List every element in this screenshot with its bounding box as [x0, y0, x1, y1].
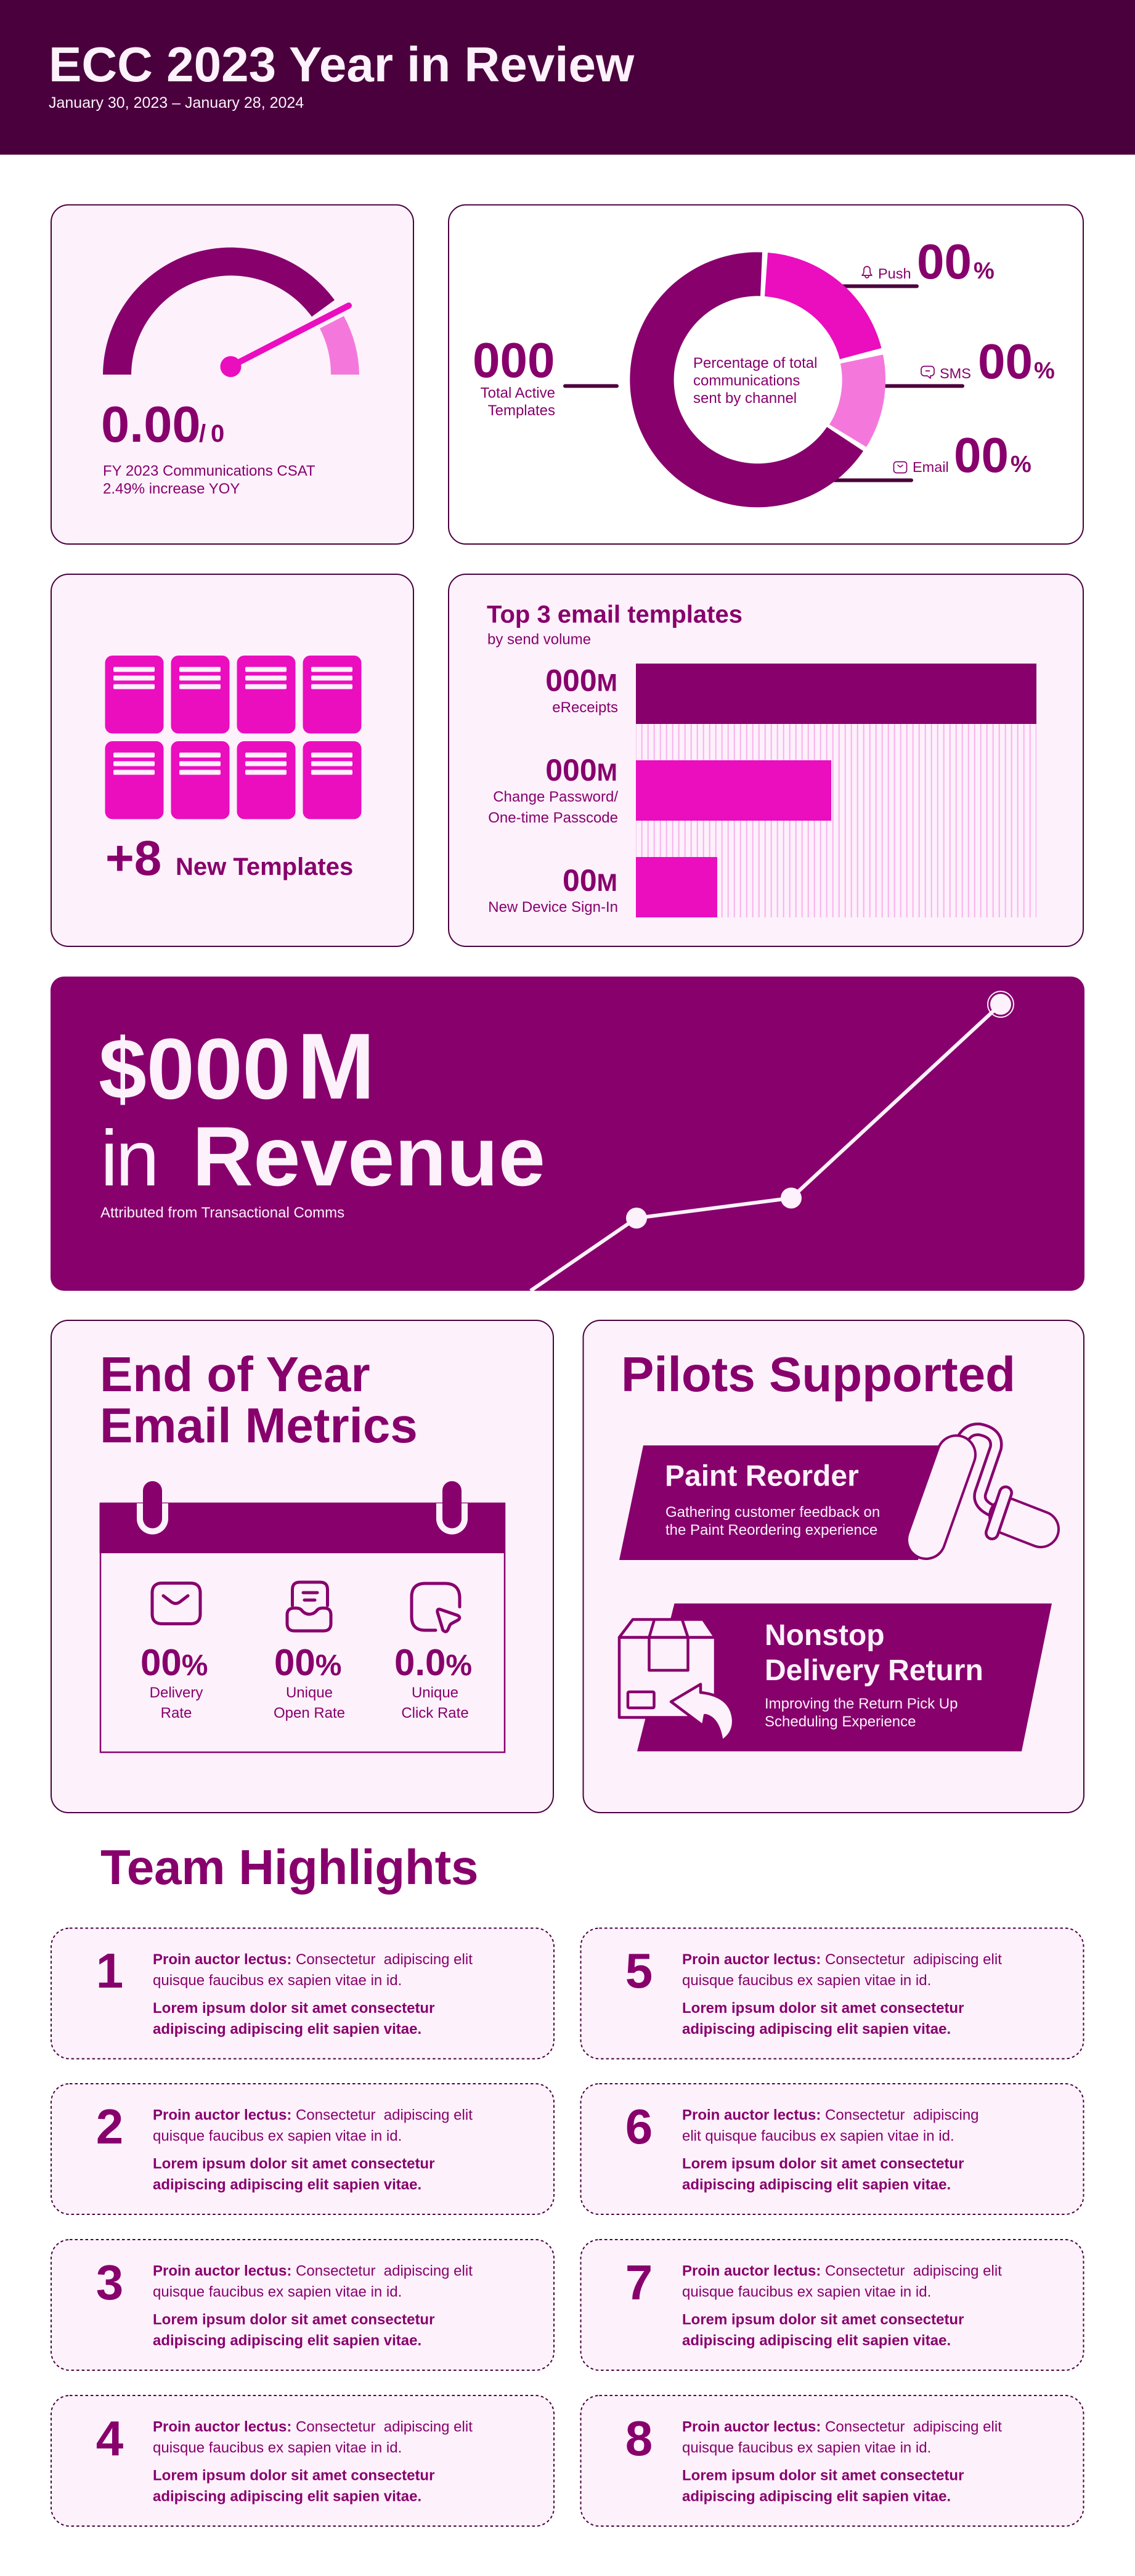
number: 1 — [96, 1943, 123, 1998]
revenue trend line — [531, 991, 1014, 1291]
email value: 00 — [954, 428, 1009, 482]
banner: nonstop delivery return — [637, 1603, 1052, 1751]
revenue value: M — [297, 1014, 375, 1119]
icon grid: eight documents — [105, 656, 361, 819]
number: 5 — [625, 1943, 653, 1998]
panel: top 3 email templates — [449, 574, 1083, 946]
number: 2 — [96, 2099, 123, 2154]
banner: paint reorder — [619, 1445, 943, 1560]
icon: delivery envelope — [152, 1583, 200, 1624]
highlight text: Proin auctor lectus: Consectetur adipiscing elit — [682, 1951, 1002, 1968]
highlight text: Lorem ipsum dolor sit amet consectetur — [153, 2155, 434, 2172]
highlight text: Lorem ipsum dolor sit amet consectetur — [682, 2467, 964, 2484]
number: 7 — [625, 2255, 653, 2310]
highlight text: Proin auctor lectus: Consectetur adipiscing elit — [153, 2262, 473, 2280]
highlight card 8 — [580, 2395, 1083, 2526]
highlight card 5 — [580, 1928, 1083, 2059]
highlight card 1 — [51, 1928, 554, 2059]
icon: email — [893, 462, 907, 473]
bar label: password: Change Password/ — [493, 789, 618, 805]
sms value: 00 — [978, 334, 1033, 389]
highlight card 2 — [51, 2084, 554, 2214]
panel: revenue — [51, 977, 1084, 1291]
highlight text: quisque faucibus ex sapien vitae in id. — [153, 2283, 402, 2301]
CSAT caption: FY 2023 Communications CSAT — [103, 463, 315, 479]
highlight text: quisque faucibus ex sapien vitae in id. — [153, 2440, 402, 2456]
nonstop description: Scheduling Experience — [765, 1713, 916, 1730]
highlight text: Lorem ipsum dolor sit amet consectetur — [682, 2155, 964, 2172]
donut center label: Percentage of total — [693, 355, 817, 372]
panel heading: Email Metrics — [100, 1398, 418, 1453]
highlight text: Proin auctor lectus: Consectetur adipiscing elit — [153, 1951, 473, 1968]
panel: channel donut — [449, 205, 1083, 544]
total templates label: Total Active — [481, 384, 555, 402]
highlight text: elit quisque faucibus ex sapien vitae in id. — [682, 2128, 954, 2144]
highlight card 6 — [580, 2084, 1083, 2214]
revenue attribution: Attributed from Transactional Comms — [100, 1205, 344, 1221]
nonstop heading: Nonstop — [765, 1619, 885, 1652]
bar chart — [636, 664, 1036, 917]
revenue value: $000 — [99, 1020, 290, 1117]
chart subheading: by send volume — [487, 631, 591, 648]
highlight card 4 — [51, 2395, 554, 2526]
icon: bell — [862, 266, 872, 278]
metric: unique open rate: Unique — [286, 1684, 333, 1701]
revenue label: in — [100, 1115, 157, 1203]
panel: email metrics — [51, 1320, 553, 1813]
metric: unique open rate: 00% — [274, 1642, 341, 1683]
highlight card 7 — [580, 2240, 1083, 2370]
panel heading: End of Year — [100, 1347, 370, 1402]
highlight text: adipiscing adipiscing elit sapien vitae. — [682, 2488, 951, 2505]
revenue label: Revenue — [192, 1110, 545, 1204]
highlight text: Lorem ipsum dolor sit amet consectetur — [682, 2000, 964, 2017]
highlight text: Lorem ipsum dolor sit amet consectetur — [153, 2000, 434, 2017]
highlight text: adipiscing adipiscing elit sapien vitae. — [682, 2333, 951, 2349]
email value: Email — [913, 459, 949, 475]
highlight text: adipiscing adipiscing elit sapien vitae. — [682, 2021, 951, 2038]
highlight text: Proin auctor lectus: Consectetur adipiscing elit — [153, 2419, 473, 2435]
highlight text: adipiscing adipiscing elit sapien vitae. — [153, 2333, 421, 2349]
icon: click cursor — [412, 1583, 460, 1631]
gauge chart — [103, 248, 359, 377]
number: 8 — [625, 2411, 653, 2466]
metric: delivery rate — [140, 1642, 208, 1721]
push value: Push — [878, 266, 911, 282]
date range: January 30, 2023 – January 28, 2024 — [49, 94, 304, 112]
metric: unique open rate: Open Rate — [274, 1705, 345, 1721]
highlight text: Proin auctor lectus: Consectetur adipiscing elit — [682, 2262, 1002, 2280]
donut chart — [630, 252, 885, 507]
calendar graphic — [100, 1481, 505, 1752]
paint reorder description: the Paint Reordering experience — [665, 1522, 877, 1538]
bar value: password: 000M — [545, 753, 617, 787]
highlight text: Proin auctor lectus: Consectetur adipiscing — [682, 2107, 979, 2123]
new templates count: New Templates — [176, 853, 353, 880]
highlight text: quisque faucibus ex sapien vitae in id. — [682, 1972, 931, 1989]
total templates value: 000 — [473, 333, 555, 388]
nonstop heading: Delivery Return — [765, 1654, 983, 1687]
highlight text: quisque faucibus ex sapien vitae in id. — [153, 2128, 402, 2144]
metric: unique click rate: 0.0% — [394, 1642, 472, 1683]
number: 6 — [625, 2099, 653, 2154]
metric: delivery rate: Delivery — [150, 1684, 203, 1701]
total templates label: Templates — [488, 402, 555, 419]
number: 4 — [96, 2411, 124, 2466]
header banner — [0, 0, 1135, 155]
CSAT caption: 2.49% increase YOY — [103, 481, 240, 497]
email value: % — [1011, 452, 1031, 477]
title: ECC 2023 Year in Review — [49, 37, 635, 92]
highlight text: Proin auctor lectus: Consectetur adipiscing elit — [153, 2107, 473, 2123]
sms value: SMS — [940, 365, 971, 381]
metric: unique open rate — [274, 1642, 345, 1721]
number: 3 — [96, 2255, 123, 2310]
highlight text: quisque faucibus ex sapien vitae in id. — [682, 2283, 931, 2301]
chart heading: Top 3 email templates — [487, 601, 742, 628]
metric: delivery rate: 00% — [140, 1642, 208, 1683]
metric: delivery rate: Rate — [161, 1705, 192, 1721]
panel: new templates — [51, 574, 413, 946]
nonstop description: Improving the Return Pick Up — [765, 1696, 958, 1712]
metric: unique click rate: Click Rate — [401, 1705, 469, 1721]
new templates count: +8 — [105, 831, 161, 885]
donut center label: communications — [693, 372, 800, 389]
icon: open inbox — [287, 1582, 331, 1631]
highlight card 3 — [51, 2240, 554, 2370]
icon: return package — [619, 1619, 733, 1741]
metric: unique click rate: Unique — [412, 1684, 458, 1701]
highlight text: adipiscing adipiscing elit sapien vitae. — [153, 2488, 421, 2505]
panel: pilots supported — [583, 1320, 1084, 1813]
highlight text: quisque faucibus ex sapien vitae in id. — [153, 1972, 402, 1989]
CSAT value: 0 — [211, 420, 224, 447]
highlight text: Lorem ipsum dolor sit amet consectetur — [153, 2312, 434, 2328]
bar label: password: One-time Passcode — [488, 810, 618, 826]
highlight text: Proin auctor lectus: Consectetur adipiscing elit — [682, 2419, 1002, 2435]
metric: unique click rate — [394, 1642, 472, 1721]
sms value: % — [1034, 358, 1055, 384]
paint reorder description: Gathering customer feedback on — [665, 1504, 880, 1521]
connector lines — [565, 286, 962, 481]
icon: paint roller — [926, 1429, 1041, 1540]
section heading: team highlights: Team Highlights — [100, 1840, 478, 1895]
CSAT value: / — [199, 420, 206, 447]
highlight text: Lorem ipsum dolor sit amet consectetur — [153, 2467, 434, 2484]
bar label: eReceipts: eReceipts — [552, 699, 618, 716]
highlight text: adipiscing adipiscing elit sapien vitae. — [153, 2176, 421, 2193]
push value: % — [974, 258, 995, 284]
push value: 00 — [917, 234, 972, 289]
donut center label: sent by channel — [693, 390, 797, 407]
highlight text: adipiscing adipiscing elit sapien vitae. — [153, 2021, 421, 2038]
bar label: device sign-in: New Device Sign-In — [488, 899, 618, 916]
panel: CSAT gauge — [51, 205, 413, 544]
highlight text: Lorem ipsum dolor sit amet consectetur — [682, 2312, 964, 2328]
bar value: eReceipts: 000M — [545, 663, 617, 697]
highlight text: quisque faucibus ex sapien vitae in id. — [682, 2440, 931, 2456]
bar value: device sign-in: 00M — [563, 863, 617, 898]
CSAT value: 0.00 — [101, 396, 201, 453]
paint reorder heading: Paint Reorder — [665, 1460, 859, 1492]
panel heading: Pilots Supported — [621, 1347, 1015, 1402]
highlight text: adipiscing adipiscing elit sapien vitae. — [682, 2176, 951, 2193]
icon: sms — [921, 366, 934, 378]
